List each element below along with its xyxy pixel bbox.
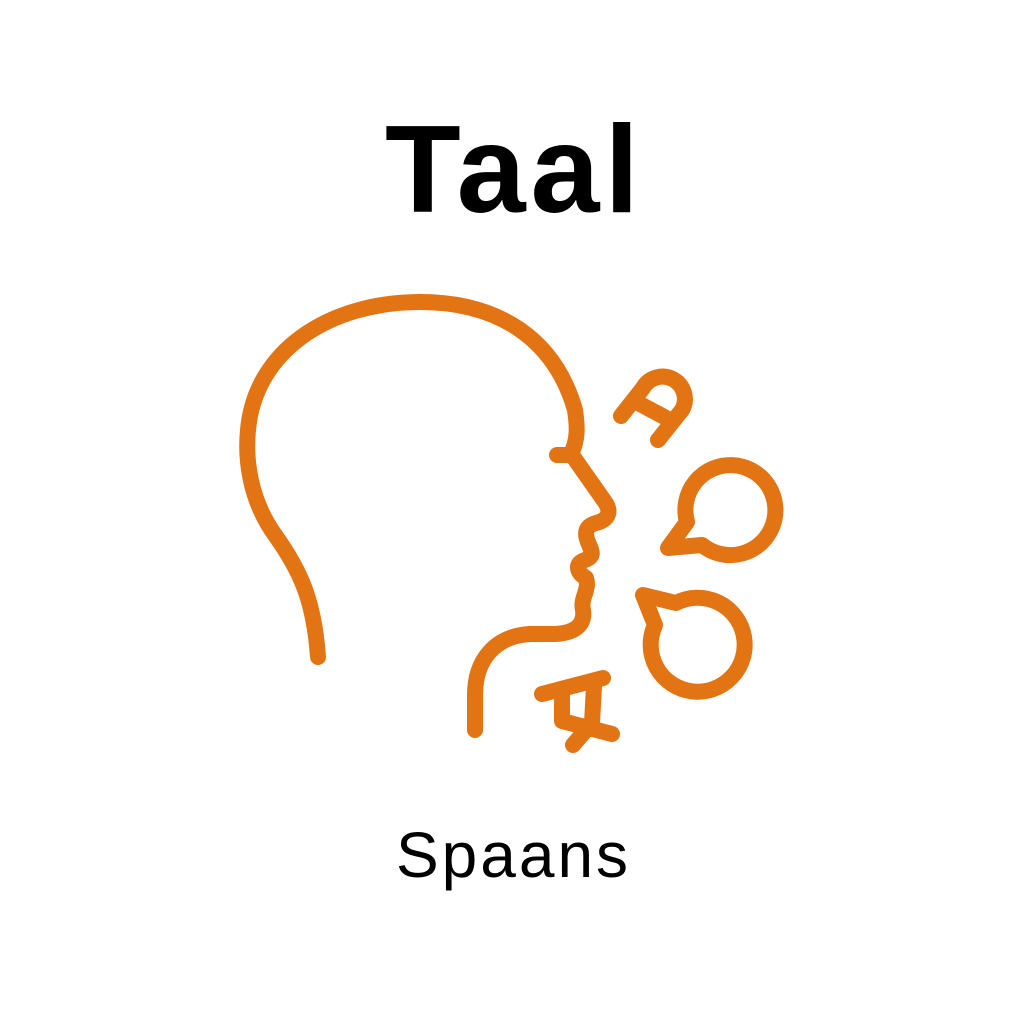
speech bubble 2 — [643, 595, 745, 692]
letter A top — [621, 377, 685, 440]
letter A bottom — [542, 678, 612, 745]
title: Taal — [385, 101, 644, 239]
subtitle: Spaans — [396, 819, 631, 891]
head profile — [247, 302, 608, 730]
speech bubble 1 — [668, 465, 775, 555]
